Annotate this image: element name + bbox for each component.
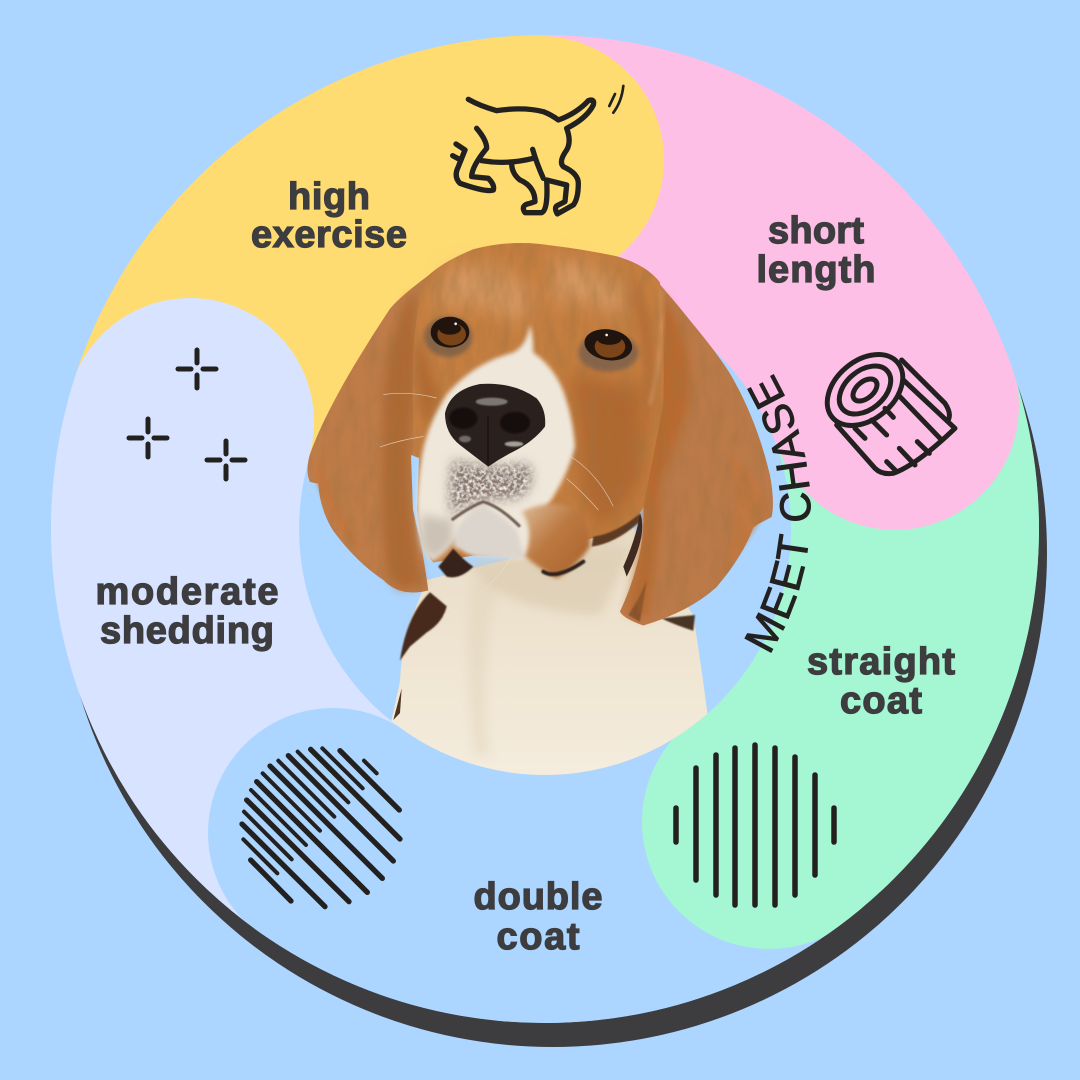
- neck shadow: [592, 513, 642, 547]
- dark patch by right ear: [623, 513, 642, 577]
- segment: straight coat: [769, 406, 915, 822]
- label: short length: short: [768, 210, 864, 252]
- label: double coat: coat: [496, 916, 580, 958]
- icon: tape measure log: [813, 340, 955, 474]
- wheel base: [80, 384, 1039, 1023]
- right jowl: [522, 504, 590, 578]
- rounded end: high exercise: [538, 36, 664, 256]
- label: high exercise: exercise: [251, 214, 407, 256]
- dog chest: [391, 528, 708, 775]
- icon: diagonal stripes circle: [242, 748, 400, 907]
- icon: dog rear with wagging tail: [453, 86, 623, 214]
- dog fur texture: [300, 235, 780, 615]
- label: moderate shedding: moderate: [96, 571, 278, 613]
- curved title: meet chase: MEET CHASE: [744, 374, 811, 653]
- label: straight coat: coat: [840, 680, 922, 722]
- icon: sparkles: [129, 350, 245, 479]
- segment: high exercise: [190, 160, 540, 422]
- label: straight coat: straight: [807, 641, 955, 683]
- chin: [453, 505, 525, 558]
- segment: short length: [540, 160, 895, 406]
- mouth line: [452, 502, 520, 527]
- label: moderate shedding: shedding: [100, 610, 274, 652]
- dog left ear: [307, 276, 428, 592]
- muzzle grey fur: [450, 460, 532, 515]
- icon: vertical stripes circle: [676, 745, 834, 905]
- rounded end: double coat: [208, 708, 404, 948]
- right lip: [543, 562, 583, 574]
- muzzle lower left shade: [421, 513, 453, 558]
- label: double coat: double: [474, 876, 602, 918]
- dog right eye: [578, 326, 638, 372]
- rounded end: moderate shedding: [68, 298, 314, 458]
- dog portrait: [300, 235, 780, 825]
- dog blaze: [417, 324, 575, 561]
- center circle: [299, 283, 791, 775]
- rounded end: straight coat: [642, 724, 864, 949]
- gap between ear and muzzle: [411, 455, 422, 545]
- dark left lip: [438, 548, 473, 577]
- dog whiskers: [380, 393, 613, 615]
- dog nose: [445, 384, 545, 467]
- label: high exercise: high: [288, 176, 370, 218]
- rounded end: short length: [778, 348, 1019, 530]
- dog muzzle detail: [421, 460, 642, 578]
- dog right ear: [620, 282, 773, 626]
- dog head: [413, 243, 664, 562]
- label: short length: length: [756, 249, 876, 291]
- segment: moderate shedding: [174, 422, 333, 833]
- dog left eye: [424, 316, 472, 357]
- segment: double coat: [333, 822, 769, 899]
